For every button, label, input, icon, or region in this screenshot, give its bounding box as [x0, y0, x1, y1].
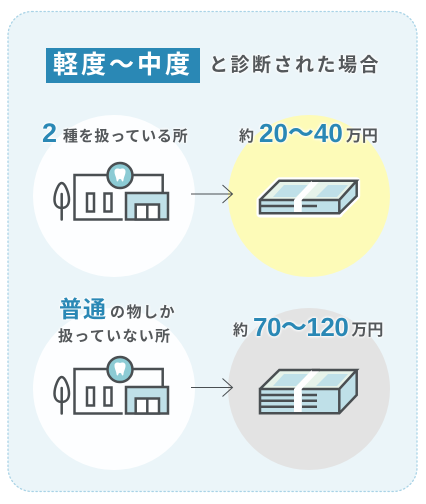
- circle: bottom clinic: [33, 308, 195, 470]
- label: top clinic type: 2 種を扱っている所: [42, 118, 188, 148]
- label: bottom clinic type line 1: 普通の物しか: [59, 296, 176, 322]
- arrow: bottom: [191, 378, 232, 396]
- heading: remainder: と診断された場合: [209, 55, 381, 76]
- icon: bottom clinic building: [54, 357, 168, 414]
- label: bottom clinic type line 2: 扱っていない所: [58, 328, 171, 345]
- icon: thin money stack: [260, 181, 357, 214]
- icon: thick money stack: [260, 370, 357, 413]
- icon: top clinic building: [54, 163, 168, 220]
- circle: top clinic: [33, 115, 195, 277]
- heading: highlighted box: 軽度〜中度: [53, 51, 193, 79]
- arrow: top: [191, 185, 232, 203]
- circle: bottom price: [228, 308, 390, 470]
- price: top: 約20〜40万円: [239, 118, 378, 148]
- circle: top price: [228, 115, 390, 277]
- price: bottom: 約70〜120万円: [233, 312, 383, 342]
